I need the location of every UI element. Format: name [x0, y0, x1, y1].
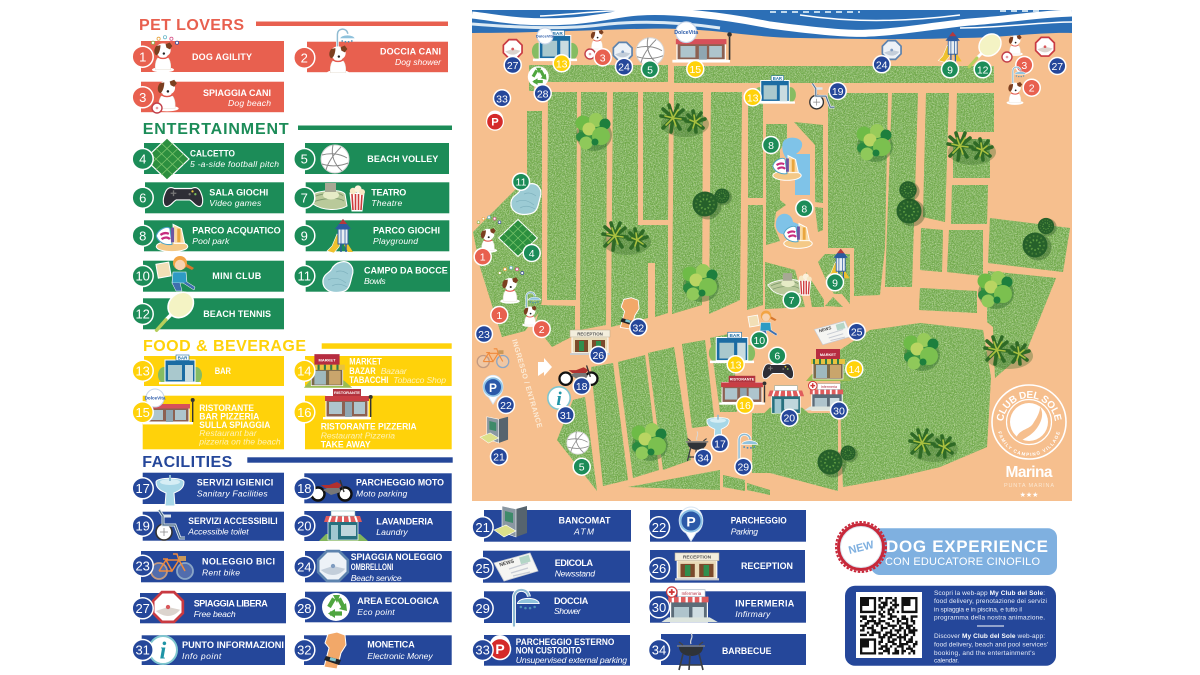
legend row 24 spiaggia noleggio ombrelloni — [294, 551, 452, 583]
marker 3 dog beach west: 3 — [600, 52, 606, 64]
legend row 9 parco giochi: Playground — [373, 236, 418, 246]
marker 11 bowls: 11 — [516, 177, 527, 189]
heading: food and beverage — [143, 338, 452, 355]
legend row 23 noleggio bici: NOLEGGIO BICI — [202, 556, 275, 566]
legend row 9 parco giochi — [294, 219, 449, 253]
legend row 26 reception: RECEPTION — [741, 561, 793, 571]
marker 33 external parking — [487, 90, 510, 134]
legend row 15 ristorante spiaggia — [132, 389, 284, 449]
legend row 13 bar: 13 — [135, 363, 150, 378]
qr description text: food delivery, beach and pool services' — [934, 642, 1048, 648]
legend row 14 market: Bazaar — [381, 366, 408, 376]
marker 12 beach tennis — [969, 29, 1006, 78]
legend row 31 punto informazioni: 31 — [135, 643, 150, 658]
legend row 9 parco giochi: PARCO GIOCHI — [373, 226, 440, 236]
legend row 6 sala giochi: Video games — [209, 198, 262, 208]
legend row 26 reception: 26 — [652, 561, 666, 576]
legend row 23 noleggio bici: 23 — [135, 558, 150, 573]
marker 3 dog beach east: 3 — [1021, 60, 1027, 72]
legend row 25 edicola — [472, 551, 630, 583]
qr description text: programma della nostra animazione. — [934, 614, 1045, 622]
logo: club del sole marina — [991, 384, 1067, 499]
legend row 16 ristorante pizzeria: 16 — [297, 405, 312, 420]
legend row 13 bar: BAR — [215, 366, 231, 376]
dark trees — [692, 181, 1057, 478]
legend row 6 sala giochi: SALA GIOCHI — [209, 188, 268, 198]
marker 20 laundry: 20 — [783, 413, 795, 425]
panel: pet lovers legend — [132, 17, 448, 113]
legend row 16 ristorante pizzeria: RISTORANTE PIZZERIA — [321, 422, 417, 432]
marker 26 reception — [570, 330, 610, 364]
legend row 1 dog agility — [132, 36, 284, 72]
legend row 24 spiaggia noleggio ombrelloni: 24 — [297, 559, 312, 574]
callout: dog experience: CON EDUCATORE CINOFILO — [885, 556, 1040, 568]
marker 13 central bar south — [709, 332, 755, 373]
marker 1 dog agility south — [491, 266, 524, 324]
marker 4 football pitch: 4 — [529, 248, 535, 260]
legend row 19 servizi accessibili: 19 — [135, 518, 150, 533]
callout: dog experience — [836, 522, 1057, 575]
qr description text: booking, and the entertainment's — [934, 650, 1036, 657]
legend row 15 ristorante spiaggia: SULLA SPIAGGIA — [199, 420, 271, 430]
marker 29 shower — [735, 434, 758, 475]
marker 32 wristband: 32 — [632, 322, 644, 334]
legend row 22 parcheggio: 22 — [652, 520, 666, 535]
legend row 18 parcheggio moto: PARCHEGGIO MOTO — [356, 478, 444, 488]
panel: facilities legend — [132, 454, 806, 670]
marker 32 wristband — [620, 298, 647, 336]
legend row 20 lavanderia: Laundry — [376, 527, 408, 537]
logo: club del sole marina: Marina — [1006, 464, 1053, 481]
panel: food and beverage legend — [132, 338, 452, 450]
legend row 7 teatro: TEATRO — [371, 188, 406, 198]
legend row 30 infermeria: 30 — [652, 600, 666, 615]
legend row 17 servizi igienici: 17 — [135, 481, 150, 496]
marker 31 info point: 31 — [560, 410, 572, 422]
legend row 11 campo da bocce: CAMPO DA BOCCE — [364, 266, 448, 276]
marker 24 umbrella east: 24 — [876, 59, 888, 71]
heading: pet lovers — [139, 17, 448, 34]
legend row 32 monetica: MONETICA — [367, 640, 415, 650]
legend row 31 punto informazioni — [132, 635, 285, 665]
legend row 18 parcheggio moto — [294, 473, 452, 503]
marker 22 parking: 22 — [500, 400, 512, 412]
marker 5 beach volley north: 5 — [647, 64, 653, 76]
legend row 24 spiaggia noleggio ombrelloni: SPIAGGIA NOLEGGIO — [351, 552, 442, 562]
legend row 20 lavanderia — [294, 511, 452, 541]
legend row 12 beach tennis: BEACH TENNIS — [203, 309, 271, 319]
callout: dog experience: DOG EXPERIENCE — [886, 537, 1048, 556]
qr code — [856, 592, 922, 658]
legend row 3 spiaggia cani: Dog beach — [228, 98, 271, 108]
marker 9 playground south — [826, 249, 850, 291]
legend row 25 edicola: EDICOLA — [555, 558, 594, 568]
marker 29 shower: 29 — [737, 462, 749, 474]
legend row 32 monetica: 32 — [297, 643, 312, 658]
legend row 32 monetica: Electronic Money — [367, 651, 433, 661]
marker 3 dog beach west — [585, 30, 611, 66]
legend row 4 calcetto: 5 -a-side football pitch — [190, 159, 279, 169]
legend row 30 infermeria: Infirmary — [735, 609, 771, 619]
legend row 5 beach volley: BEACH VOLLEY — [367, 154, 438, 164]
marker 19 accessible toilet: 19 — [832, 86, 844, 98]
legend row 33 parcheggio esterno: Unsupervised external parking — [516, 655, 627, 665]
marker 8 pool north — [762, 136, 801, 180]
legend row 27 spiaggia libera — [132, 592, 286, 623]
marker 16 restaurant pizzeria: 16 — [739, 400, 751, 412]
legend row 4 calcetto: 4 — [139, 152, 146, 167]
logo: club del sole marina: CLUB DEL SOLE — [996, 391, 1062, 421]
marker 27 free beach east — [1036, 37, 1066, 74]
legend row 19 servizi accessibili: Accessible toilet — [187, 526, 249, 536]
legend row 7 teatro: 7 — [301, 190, 308, 205]
legend row 5 beach volley: 5 — [301, 152, 308, 167]
marker 13 beach bar: 13 — [556, 58, 568, 70]
legend row 7 teatro: Theatre — [371, 198, 403, 208]
marker 13 beach bar: DolceVita — [536, 34, 555, 38]
legend row 1 dog agility: DOG AGILITY — [192, 52, 252, 62]
marker 21 atm: 21 — [493, 452, 505, 464]
marker 17 sanitary: 17 — [714, 438, 726, 450]
marker 2 dog shower east — [1007, 67, 1040, 105]
marker 27 free beach west — [503, 40, 522, 74]
legend row 33 parcheggio esterno: NON CUSTODITO — [516, 646, 582, 656]
marker 10 mini club — [748, 310, 777, 348]
legend row 21 bancomat — [472, 506, 631, 542]
qr description text: Scopri la web-app My Club del Sole: — [934, 590, 1045, 597]
legend row 5 beach volley — [294, 143, 449, 174]
heading: facilities: FACILITIES — [142, 454, 233, 471]
legend row 28 area ecologica: 28 — [297, 601, 312, 616]
legend row 29 doccia — [472, 590, 630, 627]
legend row 25 edicola: 25 — [475, 561, 490, 576]
qr description text: food delivery, prenotazione dei servizi — [934, 598, 1047, 605]
marker 5 beach volley south — [567, 432, 590, 475]
marker 34 barbecue: 34 — [697, 453, 709, 465]
legend row 16 ristorante pizzeria — [294, 389, 452, 450]
marker 15 beach restaurant: 15 — [689, 64, 701, 76]
entrance label: INGRESSO / ENTRANCE — [510, 338, 544, 429]
grass lawns — [473, 65, 1070, 495]
legend row 23 noleggio bici — [132, 551, 284, 582]
marker 20 laundry — [763, 386, 810, 426]
legend row 20 lavanderia: 20 — [297, 518, 312, 533]
marker 25 newsstand: 25 — [851, 327, 863, 339]
legend row 34 barbecue — [648, 633, 806, 670]
bush trees — [576, 113, 1014, 461]
legend row 18 parcheggio moto: 18 — [297, 481, 312, 496]
heading: food and beverage: FOOD & BEVERAGE — [143, 338, 306, 355]
marker 8 pool south — [784, 200, 813, 248]
badge: new: NEW — [847, 539, 876, 557]
legend row 28 area ecologica — [294, 592, 452, 622]
legend row 3 spiaggia cani: SPIAGGIA CANI — [203, 88, 271, 98]
legend row 22 parcheggio: Parking — [731, 526, 758, 536]
heading: entertainment — [143, 121, 452, 138]
legend row 31 punto informazioni: PUNTO INFORMAZIONI — [182, 640, 284, 650]
heading: facilities — [142, 454, 453, 471]
marker 2 dog shower east: 2 — [1029, 83, 1035, 95]
panel: web app qr — [845, 586, 1056, 666]
legend row 8 parco acquatico: 8 — [139, 228, 146, 243]
panel: entertainment legend — [132, 121, 452, 330]
legend row 9 parco giochi: 9 — [301, 228, 308, 243]
heading: entertainment: ENTERTAINMENT — [143, 121, 289, 138]
legend row 17 servizi igienici — [132, 473, 284, 506]
legend row 14 market: 14 — [297, 363, 312, 378]
legend row 15 ristorante spiaggia: Restaurant bar — [199, 428, 258, 438]
legend row 14 market: MARKET — [349, 356, 382, 366]
legend row 33 parcheggio esterno — [472, 635, 630, 666]
legend row 17 servizi igienici: Sanitary Facilities — [197, 488, 268, 498]
marker 13 central bar north: 13 — [747, 92, 759, 104]
marker 22 parking — [483, 375, 514, 414]
legend row 11 campo da bocce: Bowls — [364, 276, 386, 286]
legend row 29 doccia: Shower — [554, 606, 582, 616]
legend row 21 bancomat: 21 — [475, 520, 490, 535]
palm trees — [603, 105, 1033, 462]
legend row 3 spiaggia cani: 3 — [139, 90, 146, 105]
marker 12 beach tennis: 12 — [977, 64, 989, 76]
marker 16 restaurant pizzeria — [719, 376, 766, 414]
marker 1 dog agility south: 1 — [496, 310, 502, 322]
legend row 6 sala giochi: 6 — [139, 190, 146, 205]
legend row 4 calcetto — [132, 138, 284, 180]
qr description text: in spiaggia e in piscina, e tutto il — [934, 606, 1023, 614]
legend row 20 lavanderia: LAVANDERIA — [376, 516, 434, 526]
marker 3 dog beach east — [1002, 35, 1033, 74]
legend row 8 parco acquatico — [132, 220, 284, 252]
qr description text: calendar. — [934, 658, 959, 664]
legend row 19 servizi accessibili — [132, 510, 284, 541]
legend row 15 ristorante spiaggia: pizzeria on the beach — [198, 436, 281, 446]
legend row 2 doccia cani: DOCCIA CANI — [380, 46, 441, 56]
legend row 14 market — [294, 354, 452, 388]
legend row 4 calcetto: CALCETTO — [190, 148, 235, 158]
entrance arrow — [538, 358, 552, 376]
marker 26 reception: 26 — [592, 350, 604, 362]
marker 23 bike rental: 23 — [478, 329, 490, 341]
marker 24 umbrella west: 24 — [618, 62, 630, 74]
marker 30 infirmary: 30 — [833, 405, 845, 417]
marker 4 football pitch — [499, 220, 540, 262]
legend row 29 doccia: 29 — [475, 601, 490, 616]
marker 10 mini club: 10 — [753, 335, 765, 347]
legend row 14 market: BAZAR — [349, 366, 376, 376]
marker 1 dog agility north — [474, 216, 501, 265]
map sand background — [472, 10, 1072, 501]
legend row 31 punto informazioni: Info point — [182, 651, 222, 661]
qr description text — [934, 590, 1048, 664]
marker 28 eco point — [528, 66, 551, 102]
legend row 2 doccia cani: Dog shower — [395, 57, 442, 67]
sea and shoreline — [472, 10, 1072, 39]
legend row 15 ristorante spiaggia: RISTORANTE — [199, 403, 254, 413]
legend row 34 barbecue: BARBECUE — [722, 646, 772, 656]
marker 30 infirmary — [804, 381, 851, 419]
marker 23 bike rental — [476, 326, 509, 368]
heading: pet lovers: PET LOVERS — [139, 17, 244, 34]
marker 6 video games — [762, 347, 794, 379]
legend row 6 sala giochi — [132, 182, 284, 213]
legend row 33 parcheggio esterno: 33 — [475, 643, 490, 658]
marker 17 sanitary — [707, 415, 729, 452]
legend row 21 bancomat: BANCOMAT — [558, 516, 611, 526]
legend row 21 bancomat: ATM — [573, 526, 595, 536]
legend row 23 noleggio bici: Rent bike — [202, 568, 240, 578]
marker 28 eco point: 28 — [537, 88, 549, 100]
marker 15 beach restaurant — [672, 22, 732, 78]
marker 14 market: 14 — [848, 364, 860, 376]
marker 34 barbecue — [686, 431, 712, 466]
legend row 28 area ecologica: Eco point — [357, 607, 395, 617]
legend row 3 spiaggia cani — [132, 80, 284, 113]
marker 2 dog shower west: 2 — [539, 324, 545, 336]
marker 14 market — [806, 349, 863, 381]
legend row 30 infermeria — [648, 587, 806, 623]
marker 8 pool north: 8 — [768, 140, 774, 152]
legend row 13 bar — [132, 355, 284, 386]
legend row 10 mini club — [132, 256, 284, 292]
legend row 10 mini club: MINI CLUB — [212, 271, 262, 281]
marker 13 central bar south: 13 — [730, 359, 742, 371]
marker 5 beach volley north — [636, 38, 664, 78]
legend row 7 teatro — [294, 182, 449, 213]
marker 6 video games: 6 — [774, 351, 780, 363]
legend row 18 parcheggio moto: Moto parking — [356, 488, 408, 498]
marker 18 moto parking: 18 — [576, 381, 588, 393]
legend row 25 edicola: Newsstand — [555, 568, 595, 578]
legend row 27 spiaggia libera: SPIAGGIA LIBERA — [194, 598, 268, 608]
legend row 29 doccia: DOCCIA — [554, 596, 589, 606]
marker 1 dog agility north: 1 — [480, 252, 486, 264]
marker 25 newsstand — [814, 321, 865, 345]
legend row 16 ristorante pizzeria: TAKE AWAY — [321, 440, 371, 450]
pools — [776, 138, 810, 234]
badge: new — [836, 522, 886, 572]
marker 21 atm — [480, 417, 508, 465]
legend row 2 doccia cani: 2 — [301, 50, 308, 66]
legend row 34 barbecue: 34 — [652, 643, 666, 658]
legend row 17 servizi igienici: SERVIZI IGIENICI — [197, 478, 273, 488]
legend row 22 parcheggio — [648, 507, 806, 542]
logo: club del sole marina: FAMILY CAMPING VILLAGE — [998, 431, 1060, 456]
logo: club del sole marina: PUNTA MARINA — [1004, 483, 1054, 489]
legend row 8 parco acquatico: PARCO ACQUATICO — [192, 226, 281, 236]
marker 24 umbrella west — [613, 42, 632, 75]
marker 13 central bar north — [744, 76, 796, 106]
legend row 32 monetica — [294, 632, 452, 669]
marker 33 external parking: 33 — [496, 93, 508, 105]
legend row 19 servizi accessibili: SERVIZI ACCESSIBILI — [188, 516, 278, 526]
legend row 8 parco acquatico: Pool park — [192, 236, 230, 246]
legend row 22 parcheggio: PARCHEGGIO — [731, 516, 787, 526]
marker 7 theatre — [768, 273, 812, 308]
legend row 14 market: Tobacco Shop — [393, 375, 446, 385]
legend row 1 dog agility: 1 — [139, 50, 146, 64]
legend row 27 spiaggia libera: Free beach — [194, 609, 236, 619]
legend row 30 infermeria: INFERMERIA — [735, 598, 795, 608]
legend row 2 doccia cani — [294, 29, 448, 75]
marker 27 free beach east: 27 — [1051, 61, 1063, 73]
marker 2 dog shower west — [522, 292, 550, 338]
marker 19 accessible toilet — [810, 82, 846, 109]
marker 11 bowls — [511, 173, 541, 214]
legend row 33 parcheggio esterno: PARCHEGGIO ESTERNO — [516, 637, 614, 647]
marker 31 info point — [548, 387, 574, 424]
marker 9 playground south: 9 — [832, 277, 838, 289]
marker 27 free beach west: 27 — [507, 60, 519, 72]
legend row 12 beach tennis: 12 — [135, 307, 150, 322]
legend row 11 campo da bocce — [294, 261, 450, 292]
legend row 14 market: TABACCHI — [349, 375, 388, 385]
legend row 24 spiaggia noleggio ombrelloni: Beach service — [351, 573, 402, 583]
marker 9 playground north — [938, 32, 962, 78]
panel: resort map — [472, 10, 1072, 501]
marker 24 umbrella east — [873, 41, 901, 73]
legend row 11 campo da bocce: 11 — [298, 269, 311, 284]
logo: club del sole marina: ★★★ — [1020, 491, 1038, 499]
legend row 27 spiaggia libera: 27 — [135, 601, 150, 616]
marker 9 playground north: 9 — [947, 64, 953, 76]
marker 5 beach volley south: 5 — [579, 462, 585, 474]
marker 13 beach bar — [532, 28, 578, 72]
legend row 26 reception — [648, 550, 805, 583]
marker 7 theatre: 7 — [789, 295, 795, 307]
legend row 15 ristorante spiaggia: 15 — [135, 405, 150, 420]
legend row 12 beach tennis — [132, 287, 284, 330]
marker 8 pool south: 8 — [801, 203, 807, 215]
legend row 10 mini club: 10 — [135, 269, 150, 284]
legend row 16 ristorante pizzeria: Restaurant Pizzeria — [321, 430, 395, 440]
legend row 15 ristorante spiaggia: BAR PIZZERIA — [199, 412, 260, 422]
marker 18 moto parking — [559, 365, 597, 394]
legend row 28 area ecologica: AREA ECOLOGICA — [357, 596, 440, 606]
legend row 24 spiaggia noleggio ombrelloni: OMBRELLONI — [351, 562, 393, 572]
qr description text: Discover My Club del Sole web-app: — [934, 633, 1045, 640]
